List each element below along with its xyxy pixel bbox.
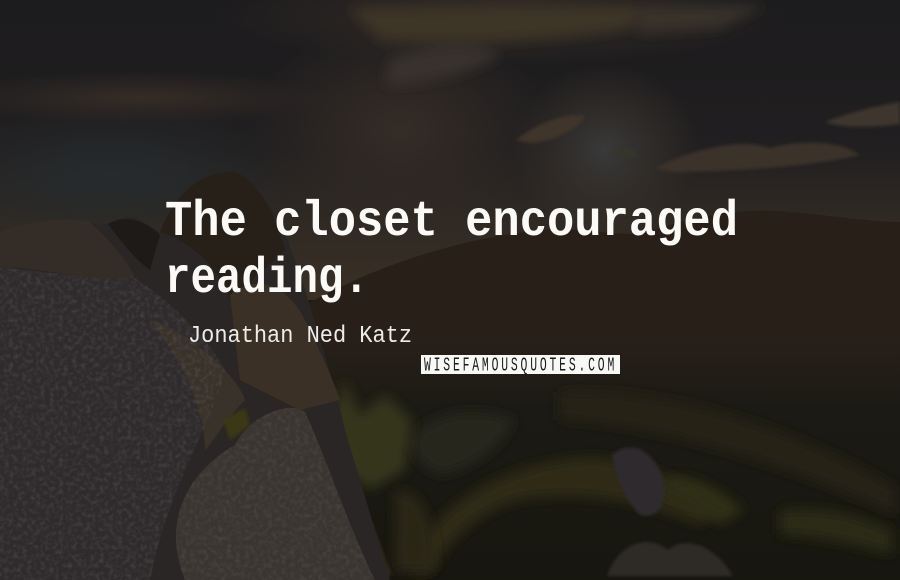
quote text	[165, 194, 738, 308]
background: dusk sky	[0, 0, 900, 300]
background: foreground vegetation	[325, 380, 892, 576]
author attribution: Jonathan Ned Katz	[188, 323, 412, 350]
quote line 1: The closet encouraged	[165, 194, 738, 251]
clouds	[350, 6, 765, 85]
watermark logo: WISEFAMOUSQUOTES.COM	[424, 355, 617, 377]
quote line 2: reading.	[165, 251, 369, 308]
background: rock formations	[0, 172, 390, 580]
background: distant mountains	[0, 211, 900, 580]
